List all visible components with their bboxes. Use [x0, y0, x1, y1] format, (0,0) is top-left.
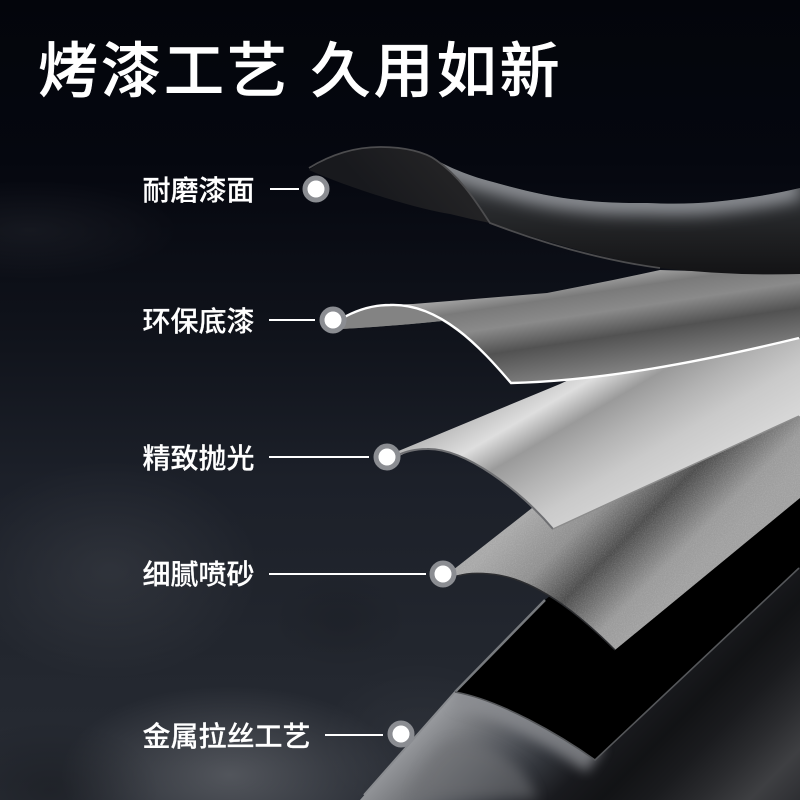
title: 烤漆工艺 久用如新	[38, 38, 563, 105]
label: wear-resistant coating	[142, 175, 327, 206]
layer: wear-resistant coating	[309, 147, 800, 274]
label: fine polish: 精致抛光	[142, 443, 255, 474]
label: eco primer: 环保底漆	[142, 306, 255, 337]
layer: metal brushed tube	[360, 567, 800, 800]
layer: fine polish	[396, 270, 800, 529]
layer: eco primer	[341, 270, 800, 383]
label: wear-resistant coating: 耐磨漆面	[142, 175, 255, 206]
label: fine sandblast	[142, 559, 454, 590]
label: brushed metal	[142, 721, 412, 752]
layer: black coating	[455, 390, 800, 760]
layer: fine sandblast	[455, 416, 800, 650]
label: fine sandblast: 细腻喷砂	[142, 559, 255, 590]
label: fine polish	[142, 443, 398, 474]
label: eco primer	[142, 306, 344, 337]
label: brushed metal: 金属拉丝工艺	[142, 721, 311, 752]
